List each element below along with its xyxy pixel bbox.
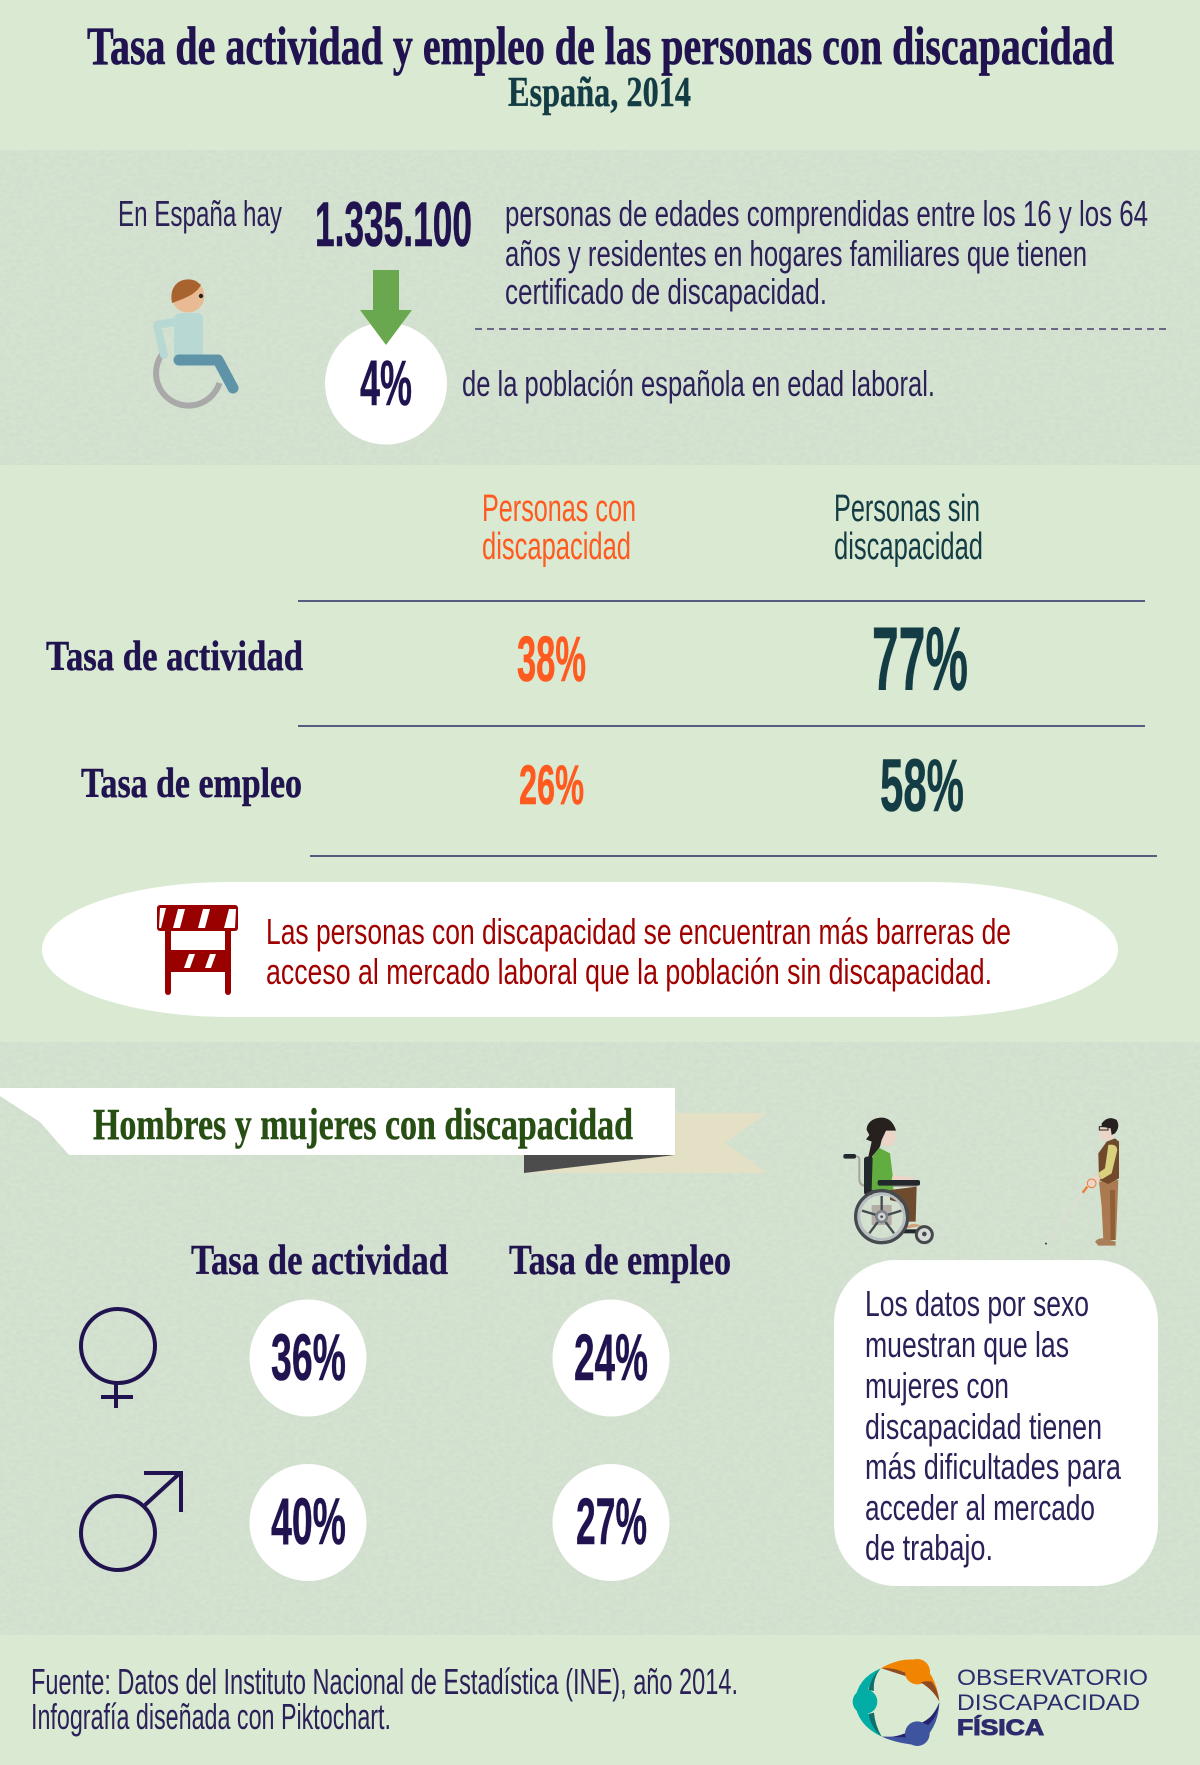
callout: data by sex: de trabajo. [865,1527,993,1568]
illustration: woman in wheelchair [843,1118,932,1243]
column heading: activity rate: Tasa de actividad [191,1238,448,1284]
logo wordmark [957,1665,1148,1740]
heading ribbon: Hombres y mujeres con discapacidad [93,1100,633,1149]
icon: male symbol [81,1473,181,1570]
big number: 1.335.100 [315,190,472,260]
text: intro: En España hay [118,193,282,234]
stat: women employment 24% [552,1300,670,1416]
column heading: employment rate: Tasa de empleo [509,1238,731,1284]
text: description [505,193,1148,312]
callout: data by sex [834,1260,1158,1586]
logo wordmark: DISCAPACIDAD [957,1690,1140,1715]
stat: women employment 24%: 24% [574,1320,648,1394]
text: share of population: de la población española en edad laboral. [462,363,935,404]
row label: employment rate: Tasa de empleo [81,761,302,807]
circle: 4% [325,322,447,444]
heading ribbon [0,1088,767,1173]
icon: female symbol [81,1309,155,1408]
footer source text [31,1661,738,1737]
row label: activity rate: Tasa de actividad [46,634,303,680]
arrow: down [360,270,412,345]
callout: data by sex: discapacidad tienen [865,1406,1102,1447]
circle: 4%: 4% [360,347,412,419]
text: description: certificado de discapacidad. [505,271,827,312]
column heading: without disability [834,488,983,568]
callout: data by sex: acceder al mercado [865,1487,1095,1528]
footer source text: Fuente: Datos del Instituto Nacional de Estadística (INE), año 2014. [31,1661,738,1702]
logo wordmark: FÍSICA [957,1715,1044,1740]
callout: data by sex: Los datos por sexo [865,1283,1089,1324]
logo: Observatorio Discapacidad Física [853,1659,1148,1746]
column heading: without disability: Personas sin [834,488,980,530]
stat: women activity 36% [250,1300,366,1416]
callout text [266,911,1011,992]
column heading: with disability: Personas con [482,488,636,530]
callout: data by sex: más dificultades para [865,1446,1122,1487]
subtitle: España, 2014 [508,70,691,116]
value: 26%: 26% [519,753,584,816]
logo wordmark: OBSERVATORIO [957,1665,1148,1690]
stat: men activity 40% [250,1464,366,1581]
stat: women activity 36%: 36% [271,1320,346,1394]
panel: men and women [0,1088,1158,1586]
stat: men employment 27% [552,1464,670,1581]
illustration: man with cane [1045,1118,1119,1246]
value: 38%: 38% [517,623,586,695]
column heading: without disability: discapacidad [834,526,983,568]
stat: men employment 27%: 27% [576,1484,647,1558]
panel: comparison table [46,488,1157,856]
icon: road barrier [157,905,238,995]
callout: data by sex: muestran que las [865,1324,1069,1365]
title [87,16,1114,116]
callout: data by sex: mujeres con [865,1365,1009,1406]
value: 77%: 77% [872,610,968,710]
stat: men activity 40%: 40% [271,1484,346,1558]
logo mark [853,1659,939,1746]
column heading: with disability [482,488,636,568]
footer source text: Infografía diseñada con Piktochart. [31,1696,391,1737]
panel: population figures [118,190,1170,444]
column heading: with disability: discapacidad [482,526,631,568]
callout: barriers [42,882,1118,1017]
icon: person in wheelchair [156,279,233,406]
value: 58%: 58% [880,744,964,827]
